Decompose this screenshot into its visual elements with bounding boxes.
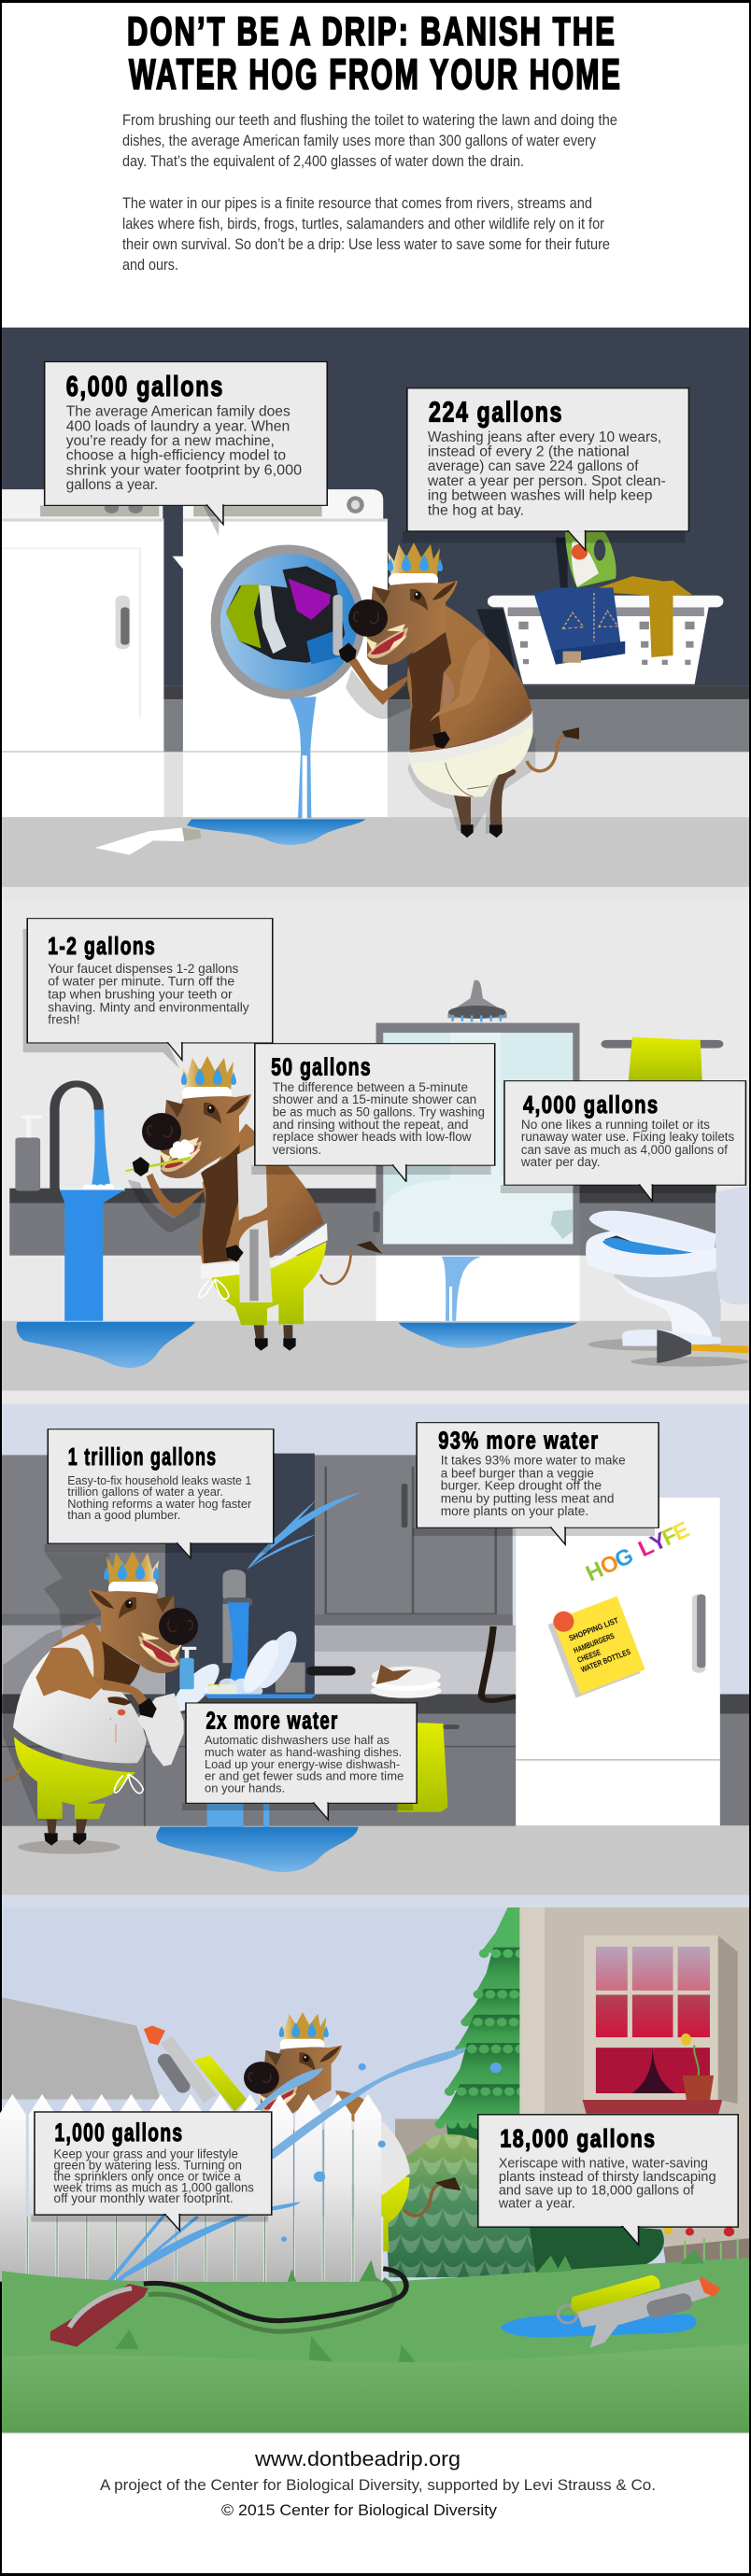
callout: 50 gallons: versions.: [273, 1142, 321, 1157]
clothes in the drum: [226, 566, 345, 663]
callout: 224 gallons: 224 gallons: [429, 396, 563, 428]
washing machine: [95, 489, 388, 855]
intro text: [122, 112, 617, 274]
hog body: bathroom: [128, 1123, 382, 1351]
counter and lower cabinets: [2, 1694, 749, 1826]
callout: 93% more water: burger. Keep drought off the: [441, 1478, 602, 1493]
intro text: day. That’s the equivalent of 2,400 glasses of water down the drain.: [122, 153, 524, 170]
callout: 93% more water: more plants on your plate.: [441, 1503, 588, 1518]
intro text: lakes where fish, birds, frogs, turtles, salamanders and other wildlife rely on it for: [122, 216, 604, 232]
callout: 2x more water: [182, 1703, 417, 1820]
callout: 2x more water: Load up your energy-wise dishwash-: [205, 1758, 400, 1771]
callout: 18,000 gallons: and save up to 18,000 gallons of: [499, 2183, 695, 2198]
callout: 93% more water: a beef burger than a veggie: [441, 1465, 594, 1480]
panel: backyard: [0, 1895, 749, 2433]
title: [127, 9, 622, 98]
callout: 2x more water: much water as hand-washing dishes.: [205, 1746, 402, 1759]
sprinkler water arcs: [103, 2048, 502, 2287]
callout: 50 gallons: The difference between a 5-minute: [273, 1079, 468, 1094]
callout: 50 gallons: replace shower heads with low-flow: [273, 1129, 472, 1144]
toothbrush and foam: [125, 1139, 194, 1176]
floor: [2, 1826, 516, 1895]
callout: 50 gallons: be as much as 50 gallons. Try washing: [273, 1105, 485, 1119]
sock: [95, 828, 201, 855]
callout: 50 gallons: 50 gallons: [271, 1053, 372, 1080]
intro text: and ours.: [122, 257, 178, 274]
callout: 6,000 gallons: The average American family does: [66, 403, 290, 419]
callout: 1-2 gallons: of water per minute. Turn off the: [48, 974, 234, 989]
callout: 1-2 gallons: tap when brushing your teeth or: [48, 986, 233, 1001]
sticky note: shopping list: CHEESE: [576, 1647, 602, 1665]
callout: 93% more water: [413, 1423, 659, 1544]
sprinkler: [50, 2284, 149, 2346]
overflow water stream: [290, 697, 316, 818]
callout: 1,000 gallons: week trims as much as 1,000 gallons: [53, 2181, 254, 2195]
callout: 1,000 gallons: the sprinklers only once or twice a: [53, 2170, 242, 2184]
shower: [373, 980, 579, 1348]
callout: 6,000 gallons: choose a high-efficiency model to: [66, 447, 286, 463]
callout: 2x more water: er and get fewer suds and more time: [205, 1769, 404, 1783]
callout: 224 gallons: the hog at bay.: [428, 502, 524, 518]
toilet and plunger: [586, 1186, 749, 1367]
water gun behind the fence: [144, 2025, 247, 2112]
house wall and window: [519, 1907, 749, 2246]
callout: 6,000 gallons: you’re ready for a new machine,: [66, 433, 275, 448]
hedge: [383, 2134, 749, 2277]
sink, faucet and dishes: [165, 1492, 442, 1715]
callout: 18,000 gallons: 18,000 gallons: [500, 2125, 657, 2153]
pine tree: [435, 1907, 522, 2156]
hog body: kitchen: [3, 1553, 184, 1854]
callout: 224 gallons: water a year per person. Spot clean-: [427, 472, 666, 488]
callout: 4,000 gallons: water per day.: [520, 1154, 601, 1169]
callout: 18,000 gallons: Xeriscape with native, water-saving: [499, 2156, 708, 2171]
callout: 18,000 gallons: water a year.: [498, 2196, 575, 2212]
callout: 50 gallons: shower and a 15-minute shower can: [273, 1091, 476, 1106]
callout: 1 trillion gallons: trillion gallons of water a year.: [67, 1485, 223, 1499]
lawn: [2, 2249, 749, 2433]
footer: [100, 2447, 656, 2519]
callout: 1-2 gallons: 1-2 gallons: [48, 932, 156, 960]
callout: 1-2 gallons: [23, 919, 273, 1069]
footer: www.dontbeadrip.org: [254, 2447, 461, 2470]
panel: bathroom: [2, 887, 749, 1401]
callout: 1,000 gallons: [31, 2112, 272, 2231]
callout: 1-2 gallons: fresh!: [48, 1012, 80, 1027]
callout: 1 trillion gallons: 1 trillion gallons: [68, 1443, 217, 1471]
footer: © 2015 Center for Biological Diversity: [221, 2501, 498, 2519]
white picket fence: [0, 2094, 383, 2282]
callout: 224 gallons: [403, 388, 688, 550]
callout: 6,000 gallons: shrink your water footprint by 6,000: [66, 462, 302, 478]
callout: 2x more water: Automatic dishwashers use half as: [205, 1734, 390, 1747]
garden hose: [144, 2269, 406, 2331]
icon: crowned hog head (laundry): [348, 542, 458, 665]
icon: crowned hog head (kitchen): [89, 1551, 198, 1673]
panel: laundry room: [2, 328, 749, 887]
icon: crowned hog head (bathroom): [142, 1056, 251, 1178]
callout: 1 trillion gallons: than a good plumber.: [67, 1509, 180, 1522]
callout: 1 trillion gallons: [45, 1429, 274, 1558]
callout: 93% more water: It takes 93% more water to make: [441, 1453, 626, 1468]
footer: A project of the Center for Biological Diversity, supported by Levi Strauss & Co.: [100, 2476, 656, 2494]
callout: 1,000 gallons: 1,000 gallons: [54, 2119, 183, 2147]
intro text: From brushing our teeth and flushing the toilet to watering the lawn and doing the: [122, 112, 617, 129]
callout: 18,000 gallons: plants instead of thirsty landscaping: [499, 2170, 716, 2185]
magnetic letters: HOG LYFE: HOGLYFE: [582, 1517, 693, 1586]
callout: 1-2 gallons: shaving. Minty and environmentally: [48, 1000, 249, 1014]
callout: 224 gallons: instead of every 2 (the national: [428, 443, 630, 459]
upper cabinets and backsplash: [2, 1454, 516, 1694]
water gun on lawn with puddle: [501, 2275, 721, 2347]
lime dish towel: [398, 1723, 460, 1812]
hog body: laundry: [339, 604, 579, 838]
callout: 1,000 gallons: green by watering less. Turning on: [53, 2159, 242, 2173]
callout: 2x more water: on your hands.: [205, 1781, 285, 1795]
callout: 6,000 gallons: [45, 362, 327, 536]
sticky note: shopping list: [546, 1591, 645, 1697]
callout: 1 trillion gallons: Easy-to-fix household leaks waste 1: [67, 1474, 251, 1487]
panel: kitchen: [2, 1391, 749, 1905]
hog body: backyard: [335, 2090, 461, 2251]
callout: 93% more water: 93% more water: [438, 1427, 600, 1454]
dripping water and puddle: [156, 1803, 359, 1872]
callout: 224 gallons: average) can save 224 gallons of: [428, 458, 639, 474]
callout: 50 gallons: [251, 1044, 495, 1182]
callout: 6,000 gallons: gallons a year.: [66, 477, 158, 493]
callout: 18,000 gallons: [478, 2115, 738, 2245]
dryer: [2, 489, 163, 817]
callout: 50 gallons: and rinsing without the repeat, and: [273, 1117, 469, 1132]
intro text: dishes, the average American family uses more than 300 gallons of water every: [122, 133, 597, 149]
sticky note: shopping list: SHOPPING LIST: [568, 1615, 620, 1643]
intro text: The water in our pipes is a finite resource that comes from rivers, streams and: [122, 195, 592, 212]
intro text: their own survival. So don’t be a drip: Use less water to save some for their future: [122, 236, 610, 253]
callout: 6,000 gallons: 6,000 gallons: [66, 370, 224, 402]
callout: 6,000 gallons: 400 loads of laundry a year. When: [66, 418, 290, 434]
callout: 1,000 gallons: Keep your grass and your lifestyle: [53, 2147, 238, 2161]
icon: crowned hog head (backyard): [244, 2012, 342, 2119]
towel rack and lime towel: [602, 1037, 723, 1080]
laundry basket with jeans and detergent: [476, 532, 723, 684]
sticky note: shopping list: HAMBURGERS: [573, 1631, 616, 1655]
refrigerator: [481, 1498, 720, 1826]
callout: 2x more water: 2x more water: [206, 1707, 339, 1734]
neighbor roof: [2, 1997, 161, 2100]
puddle: [187, 819, 365, 845]
callout: 1-2 gallons: Your faucet dispenses 1-2 gallons: [48, 961, 239, 976]
callout: 1,000 gallons: off your monthly water footprint.: [53, 2192, 234, 2206]
callout: 4,000 gallons: [501, 1081, 745, 1202]
callout: 224 gallons: ing between washes will help keep: [428, 487, 652, 503]
callout: 224 gallons: Washing jeans after every 10 wears,: [428, 429, 661, 444]
callout: 93% more water: menu by putting less meat and: [441, 1490, 614, 1505]
bathroom sink, faucet and soap: [15, 1084, 195, 1368]
callout: 1 trillion gallons: Nothing reforms a water hog faster: [67, 1498, 252, 1511]
sticky note: shopping list: WATER BOTTLES: [579, 1647, 632, 1674]
